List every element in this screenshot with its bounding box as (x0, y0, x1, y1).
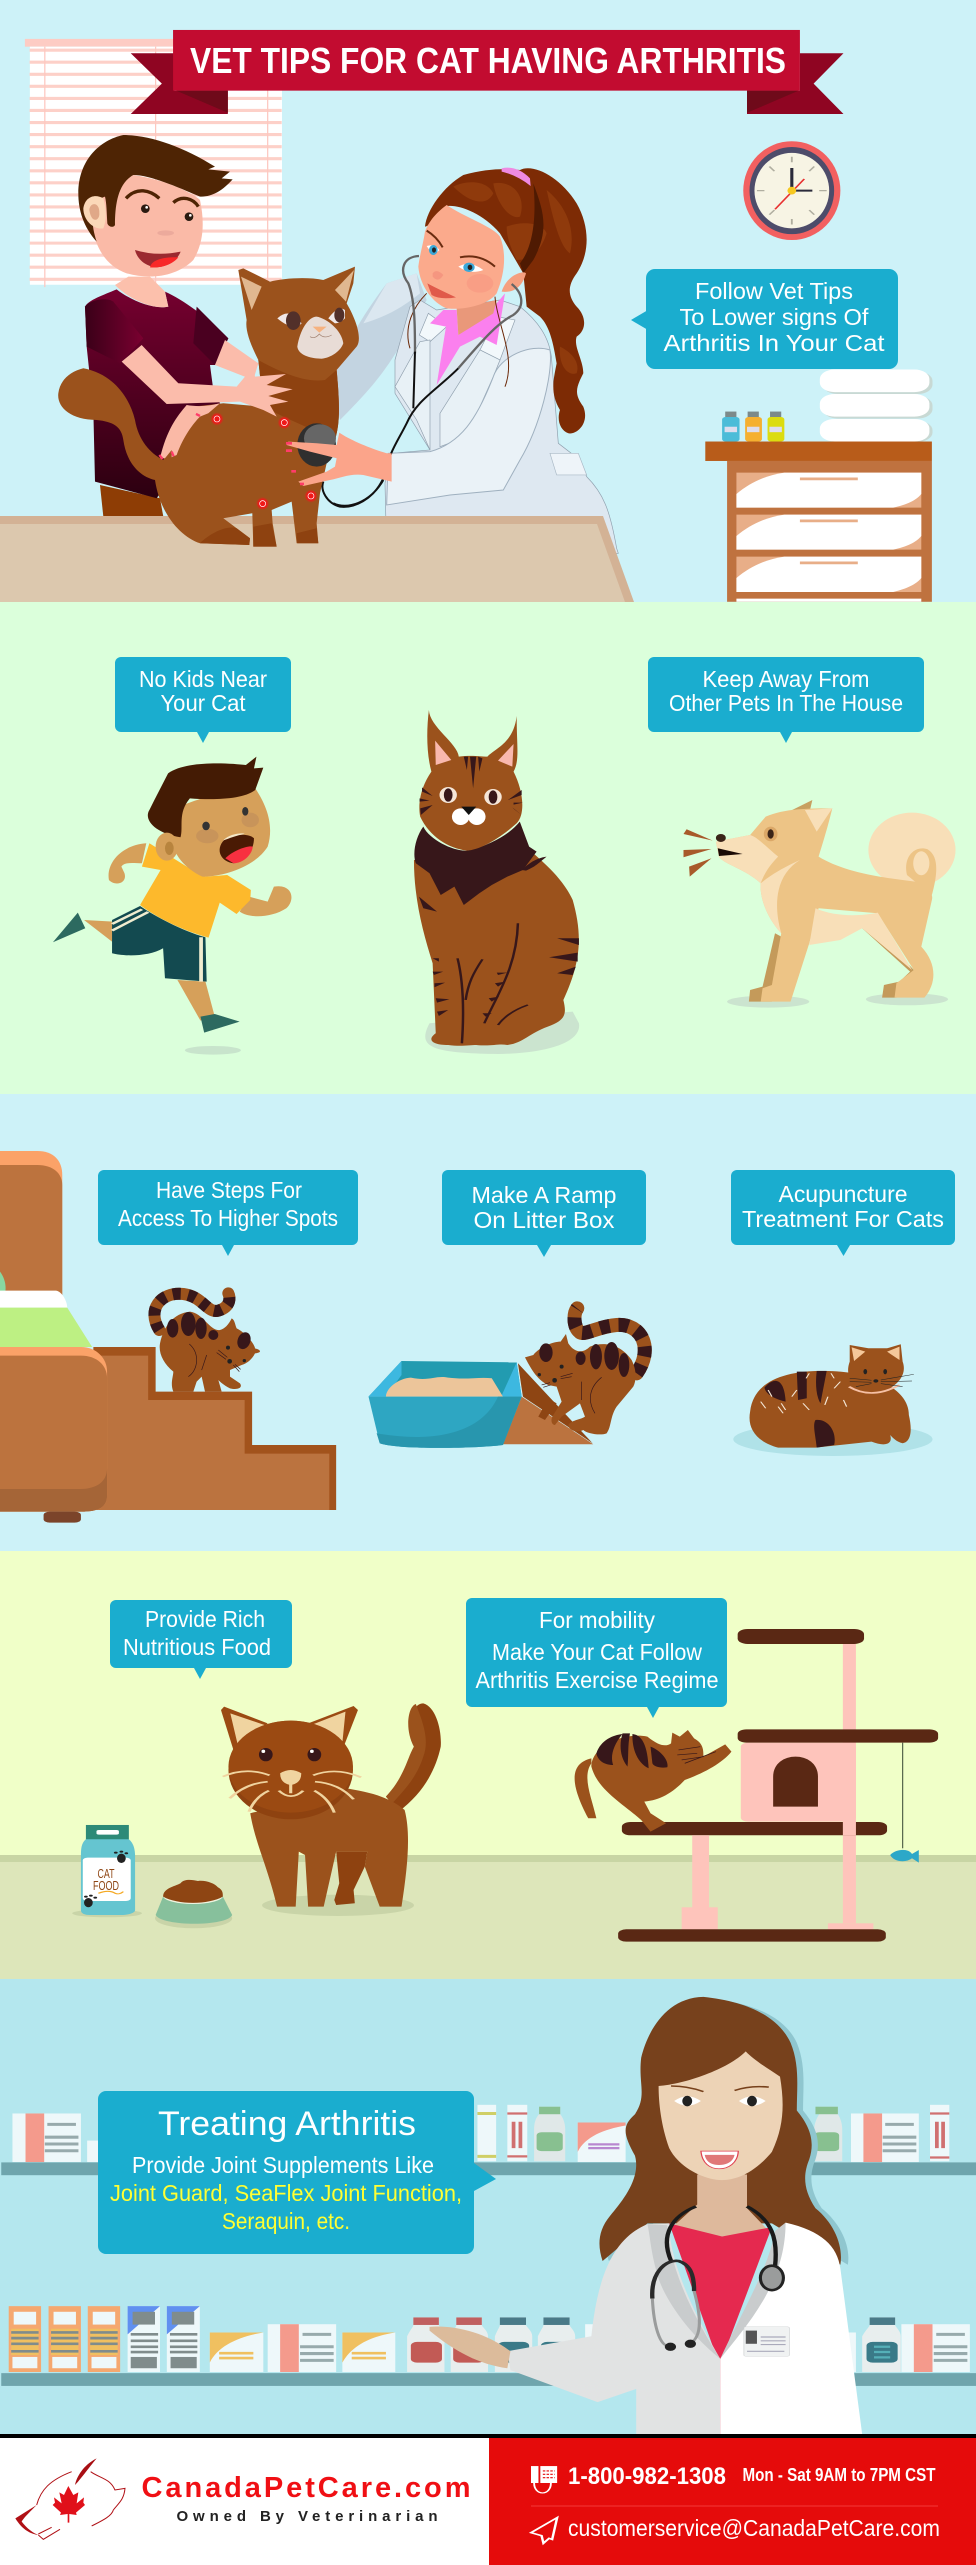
steps and sofa (0, 1151, 336, 1523)
panel: food and exercise (0, 1551, 976, 1979)
running boy (53, 757, 291, 1055)
vet hand (287, 433, 392, 486)
brown cat with tail up (221, 1703, 441, 1916)
callout: treating arthritis: Seraquin, etc. (222, 2208, 350, 2234)
callout: food (110, 1600, 292, 1679)
callout: steps (98, 1170, 358, 1256)
stretching cat (575, 1730, 731, 1832)
callout: exercise: Make Your Cat Follow (492, 1639, 702, 1665)
cat food label: FOOD (93, 1878, 119, 1893)
callout: treating arthritis: Provide Joint Supplements Like (132, 2152, 434, 2178)
exam table (0, 516, 634, 602)
panel: home adjustments (0, 1094, 976, 1551)
cat chest shading and details (200, 360, 339, 547)
email: customerservice@CanadaPetCare.com (568, 2515, 940, 2541)
barking dog (684, 800, 956, 1008)
title: VET TIPS FOR CAT HAVING ARTHRITIS (190, 40, 786, 81)
icon: phone (531, 2466, 557, 2493)
logo: pet outlines with maple leaf (15, 2458, 125, 2539)
man's arms (215, 340, 258, 380)
cat food label: CAT (98, 1866, 115, 1881)
cabinet with towels and bottles (705, 370, 933, 602)
callout: steps: Have Steps For (156, 1177, 302, 1203)
cat tree (618, 1629, 938, 1942)
pharmacist (430, 1997, 862, 2434)
food bag (72, 1825, 142, 1917)
cat body (58, 267, 359, 547)
callout: acupuncture: Acupuncture (778, 1181, 908, 1207)
panel: keep kids and pets away (0, 602, 976, 1094)
callout: ramp: Make A Ramp (472, 1182, 616, 1208)
callout: exercise: Arthritis Exercise Regime (476, 1667, 718, 1693)
cat food label (93, 1866, 119, 1893)
wall clock (743, 141, 840, 240)
cat at litter box (525, 1308, 645, 1434)
callout: treating arthritis (98, 2091, 496, 2254)
callout: treating arthritis: Joint Guard, SeaFlex Joint Function, (110, 2180, 462, 2206)
callout: exercise (466, 1598, 727, 1718)
callout: follow vet tips: Arthritis In Your Cat (664, 330, 885, 356)
icon: paper plane (531, 2518, 557, 2543)
opening hours: Mon - Sat 9AM to 7PM CST (742, 2465, 936, 2485)
phone number: 1-800-982-1308 (568, 2463, 726, 2490)
panel: vet exam room (0, 0, 976, 602)
pharmacy shelves and products (1, 2105, 976, 2386)
callout: food: Nutritious Food (123, 1634, 271, 1660)
big sitting cat (414, 710, 579, 1054)
callout: no kids: No Kids Near (139, 666, 267, 692)
callout: acupuncture: Treatment For Cats (742, 1206, 944, 1232)
callout: steps: Access To Higher Spots (118, 1205, 338, 1231)
callout: follow vet tips (631, 269, 898, 369)
footer (0, 2434, 976, 2565)
resting cat with acupuncture needles (733, 1344, 933, 1456)
callout: ramp (442, 1170, 646, 1257)
callout: exercise: For mobility (539, 1607, 655, 1633)
callout: food: Provide Rich (145, 1606, 265, 1632)
cat on steps (154, 1293, 260, 1392)
litter box with ramp (369, 1361, 593, 1448)
callout: other pets: Keep Away From (702, 666, 870, 692)
callout: other pets: Other Pets In The House (669, 690, 903, 716)
food bowl (155, 1880, 232, 1928)
vet in white coat (322, 168, 618, 553)
callout: other pets (648, 657, 924, 743)
callout: no kids: Your Cat (160, 690, 246, 716)
title banner (131, 30, 843, 114)
window blinds (25, 39, 282, 287)
arthritis spots (210, 412, 318, 510)
brown cat and hands (58, 267, 392, 547)
stethoscope chest piece (297, 423, 336, 467)
panel: treating arthritis pharmacy (0, 1979, 976, 2434)
brand name: CanadaPetCare.com (142, 2472, 470, 2504)
callout: treating arthritis: Treating Arthritis (158, 2105, 416, 2143)
callout: acupuncture (731, 1170, 955, 1256)
callout: no kids (115, 657, 291, 743)
callout: follow vet tips: To Lower signs Of (680, 304, 869, 330)
callout: ramp: On Litter Box (474, 1207, 615, 1233)
man in maroon shirt (78, 135, 233, 517)
callout: follow vet tips: Follow Vet Tips (695, 278, 853, 304)
tagline: Owned By Veterinarian (176, 2508, 438, 2525)
